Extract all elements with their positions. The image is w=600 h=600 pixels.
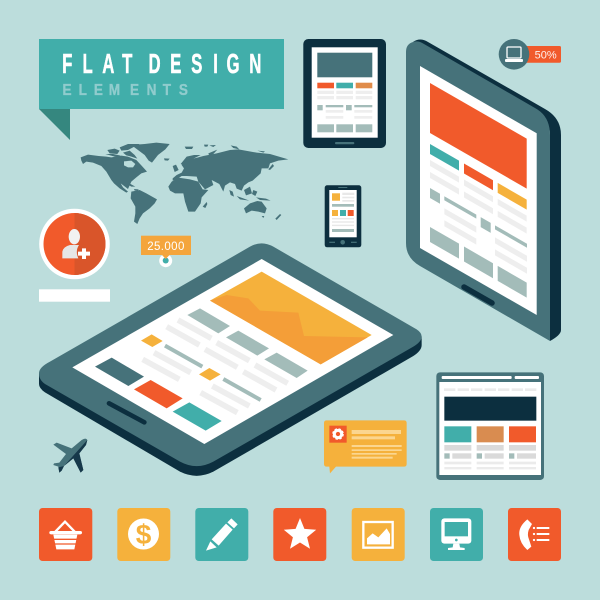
map marker 25.000 bbox=[141, 236, 191, 267]
avatar name bar bbox=[39, 289, 110, 302]
flat tablet bbox=[303, 39, 386, 148]
speech bubble notification bbox=[324, 420, 407, 473]
percentage label: 50% bbox=[535, 49, 557, 61]
subheading: elements: ELEMENTS bbox=[62, 82, 188, 99]
icon tile: dollar: $ bbox=[136, 519, 152, 550]
icon tile: phone list bbox=[508, 508, 561, 561]
icon tile: picture bbox=[352, 508, 405, 561]
marker value: 25.000 bbox=[147, 241, 185, 253]
smartphone bbox=[325, 185, 361, 247]
icon tile: star bbox=[273, 508, 326, 561]
icon: laptop bbox=[505, 47, 523, 62]
title banner bbox=[39, 39, 284, 140]
icon tile: monitor bbox=[430, 508, 483, 561]
icon tile: basket bbox=[39, 508, 92, 561]
browser window bbox=[436, 372, 544, 480]
world map bbox=[81, 143, 288, 224]
icon: add user bbox=[62, 229, 90, 259]
icon: gear bbox=[333, 429, 343, 439]
laptop badge 50% bbox=[499, 39, 561, 70]
lying isometric tablet bbox=[39, 243, 422, 476]
avatar badge bbox=[39, 209, 110, 279]
upright isometric tablet bbox=[406, 40, 561, 341]
heading: flat design: FLATDESIGN bbox=[62, 48, 261, 79]
icon tile: pencil bbox=[195, 508, 248, 561]
icon tile: dollar bbox=[117, 508, 170, 561]
icon: airplane bbox=[53, 439, 87, 473]
